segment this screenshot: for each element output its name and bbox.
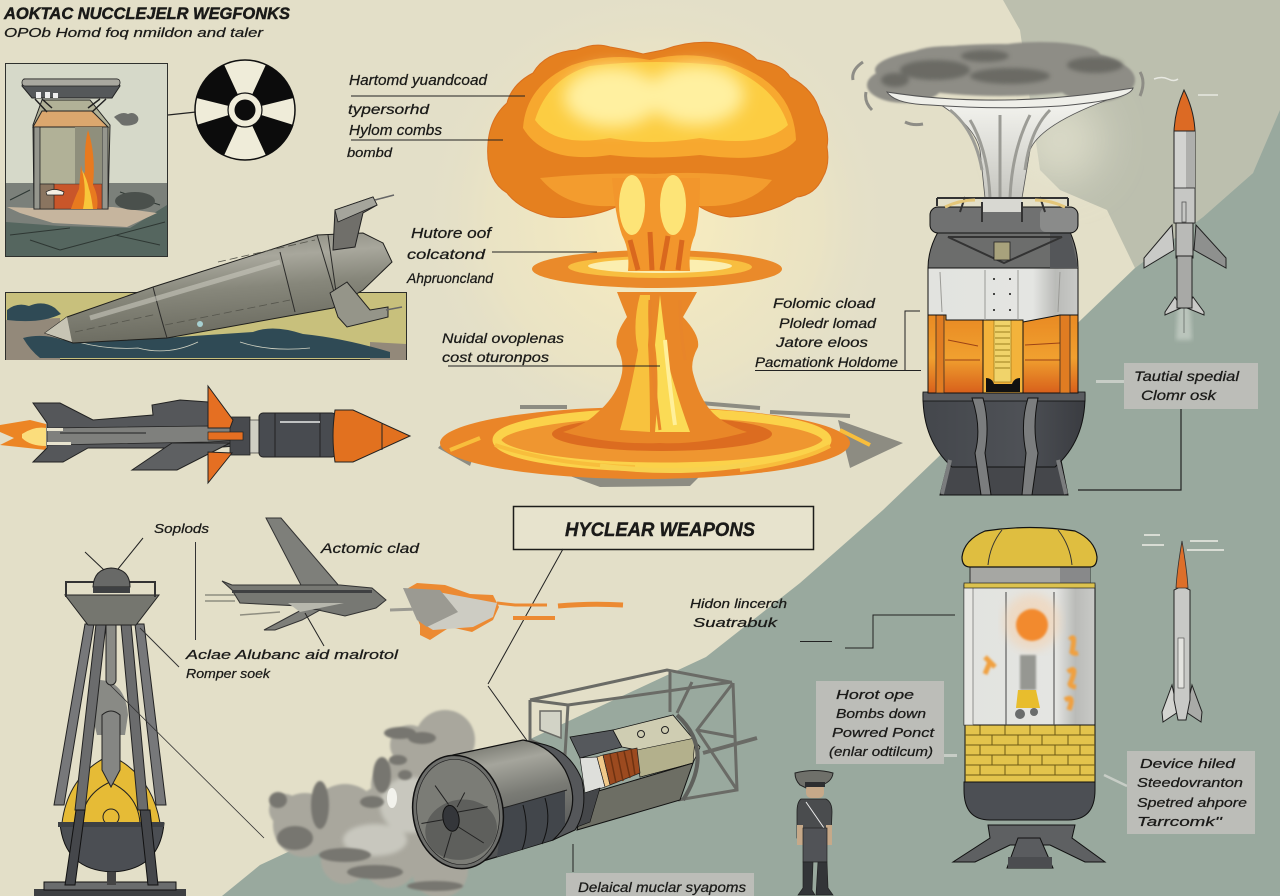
label: cloud top annotations: typersorhd	[348, 101, 430, 117]
illustration: yellow-capped capsule	[953, 528, 1105, 868]
collar	[930, 197, 1078, 233]
orange core window	[928, 313, 1078, 393]
cap	[488, 42, 828, 218]
bomb ring section	[523, 740, 584, 843]
label: stem annotations: cost oturonpos	[442, 349, 549, 365]
callout: horot box: Powred Ponct	[832, 725, 936, 740]
capsule legs and bowl	[923, 392, 1085, 495]
capsule yellow cap	[962, 528, 1097, 567]
callout: horot box: (enlar odtilcum)	[829, 744, 933, 759]
illustration: large cutaway bomb	[404, 670, 757, 876]
bomb fin grille	[574, 788, 600, 828]
label: cloud top annotations: Hartomd yuandcoad	[349, 72, 488, 89]
label: soplods: Soplods	[154, 521, 210, 536]
label: bottom box	[566, 844, 754, 896]
capsule neck	[964, 566, 1095, 588]
callout: tautial box: Clomr osk	[1141, 387, 1217, 403]
title	[3, 4, 291, 40]
bomb end face	[404, 748, 512, 876]
label: hidon annotation: Hidon lincerch	[690, 596, 787, 611]
label: soplods	[154, 521, 210, 640]
label: mid left cloud annotations: Ahpruoncland	[406, 270, 494, 286]
label: right capsule annotations: Folomic cload	[773, 295, 876, 311]
title: AOKTAC NUCCLEJELR WEGFONKS	[3, 4, 291, 23]
callout: horot box: Horot ope	[836, 687, 914, 702]
icon: standing person	[795, 770, 833, 895]
label: bottom box: Delaical muclar syapoms	[578, 879, 746, 895]
grey mushroom smoke cloud	[853, 42, 1143, 198]
label: aclae annotation: Romper soek	[186, 666, 272, 681]
connector line: panel to radiation symbol	[168, 112, 196, 115]
label: right capsule annotations: Pacmationk Holdome	[755, 354, 898, 370]
capsule window	[964, 585, 1095, 725]
label: hidon annotation: Suatrabuk	[693, 615, 779, 630]
icon: radiation symbol	[195, 60, 295, 160]
callout: horot box: Bombs down	[836, 706, 926, 721]
callout: device box: Device hiled	[1140, 756, 1236, 771]
bomb lower hull	[577, 763, 693, 830]
illustration: upper capsule device	[923, 197, 1085, 495]
background: green-grey diagonal field	[222, 110, 1280, 896]
callout: tautial box: Tautial spedial	[1134, 368, 1240, 384]
bomb main drum	[453, 740, 573, 868]
label: right capsule annotations: Jatore eloos	[775, 334, 868, 350]
label: aclae annotation: Aclae Alubanc aid malrotol	[185, 647, 400, 662]
white panel	[928, 268, 1078, 322]
bomb cage frame	[530, 670, 757, 800]
label: stem annotations	[442, 330, 660, 366]
panel: reactor tower illustration	[6, 64, 168, 256]
label: aclae annotation	[185, 647, 400, 681]
label: cloud top annotations	[347, 72, 525, 160]
glow behind cloud on right	[1018, 98, 1102, 182]
illustration: tower with yellow sphere	[34, 538, 186, 896]
label: right capsule annotations: Ploledr lomad	[779, 315, 877, 331]
label: atomic cloud: Actomic clad	[320, 540, 420, 556]
callout: device box	[1104, 751, 1255, 834]
stem	[563, 292, 747, 443]
title box: Hyclear Weapons: HYCLEAR WEAPONS	[565, 520, 755, 541]
tower legs	[54, 615, 166, 885]
label: cloud top annotations: bombd	[347, 145, 393, 160]
illustration: cruise bomb	[45, 195, 402, 343]
ring cloud	[532, 250, 782, 288]
yellow sphere and base	[34, 755, 186, 896]
capsule dark base	[964, 782, 1095, 820]
callout: device box: Tarrcomk''	[1137, 814, 1223, 829]
illustration: exhaust plume	[390, 583, 623, 640]
label: right capsule annotations	[755, 295, 921, 370]
neck	[612, 175, 700, 271]
label: mid left cloud annotations: colcatond	[407, 246, 487, 262]
capsule feet	[953, 825, 1105, 868]
smoke cloud behind bomb	[269, 710, 475, 896]
label: cloud top annotations: Hylom combs	[349, 122, 443, 139]
background: upper-right grey field	[1003, 0, 1280, 268]
illustration: horizontal missile with flame	[0, 386, 410, 483]
illustration: jet plane	[110, 518, 386, 838]
illustration: upper right rocket	[1144, 78, 1226, 340]
callout: device box: Spetred ahpore	[1137, 795, 1247, 810]
callout: device box: Steedovranton	[1137, 775, 1243, 790]
title box: Hyclear Weapons	[488, 506, 814, 742]
glow around cloud	[415, 0, 895, 455]
title: OPOb Homd foq nmildon and taler	[4, 25, 264, 40]
label: mid left cloud annotations	[406, 225, 597, 286]
illustration: lower right rocket	[1142, 535, 1224, 722]
brick band	[965, 725, 1095, 782]
ground fire ring	[438, 403, 903, 487]
label: mid left cloud annotations: Hutore oof	[411, 225, 493, 242]
panel: yellow strip behind cruise bomb	[6, 292, 406, 360]
callout: horot box	[816, 681, 957, 764]
tower top platform	[65, 538, 159, 625]
upper dome	[928, 232, 1078, 268]
label: hidon annotation	[690, 596, 955, 648]
callout: tautial box	[1078, 363, 1258, 490]
bomb rear shell	[570, 715, 700, 793]
label: stem annotations: Nuidal ovoplenas	[442, 330, 564, 346]
main mushroom cloud	[415, 0, 903, 487]
